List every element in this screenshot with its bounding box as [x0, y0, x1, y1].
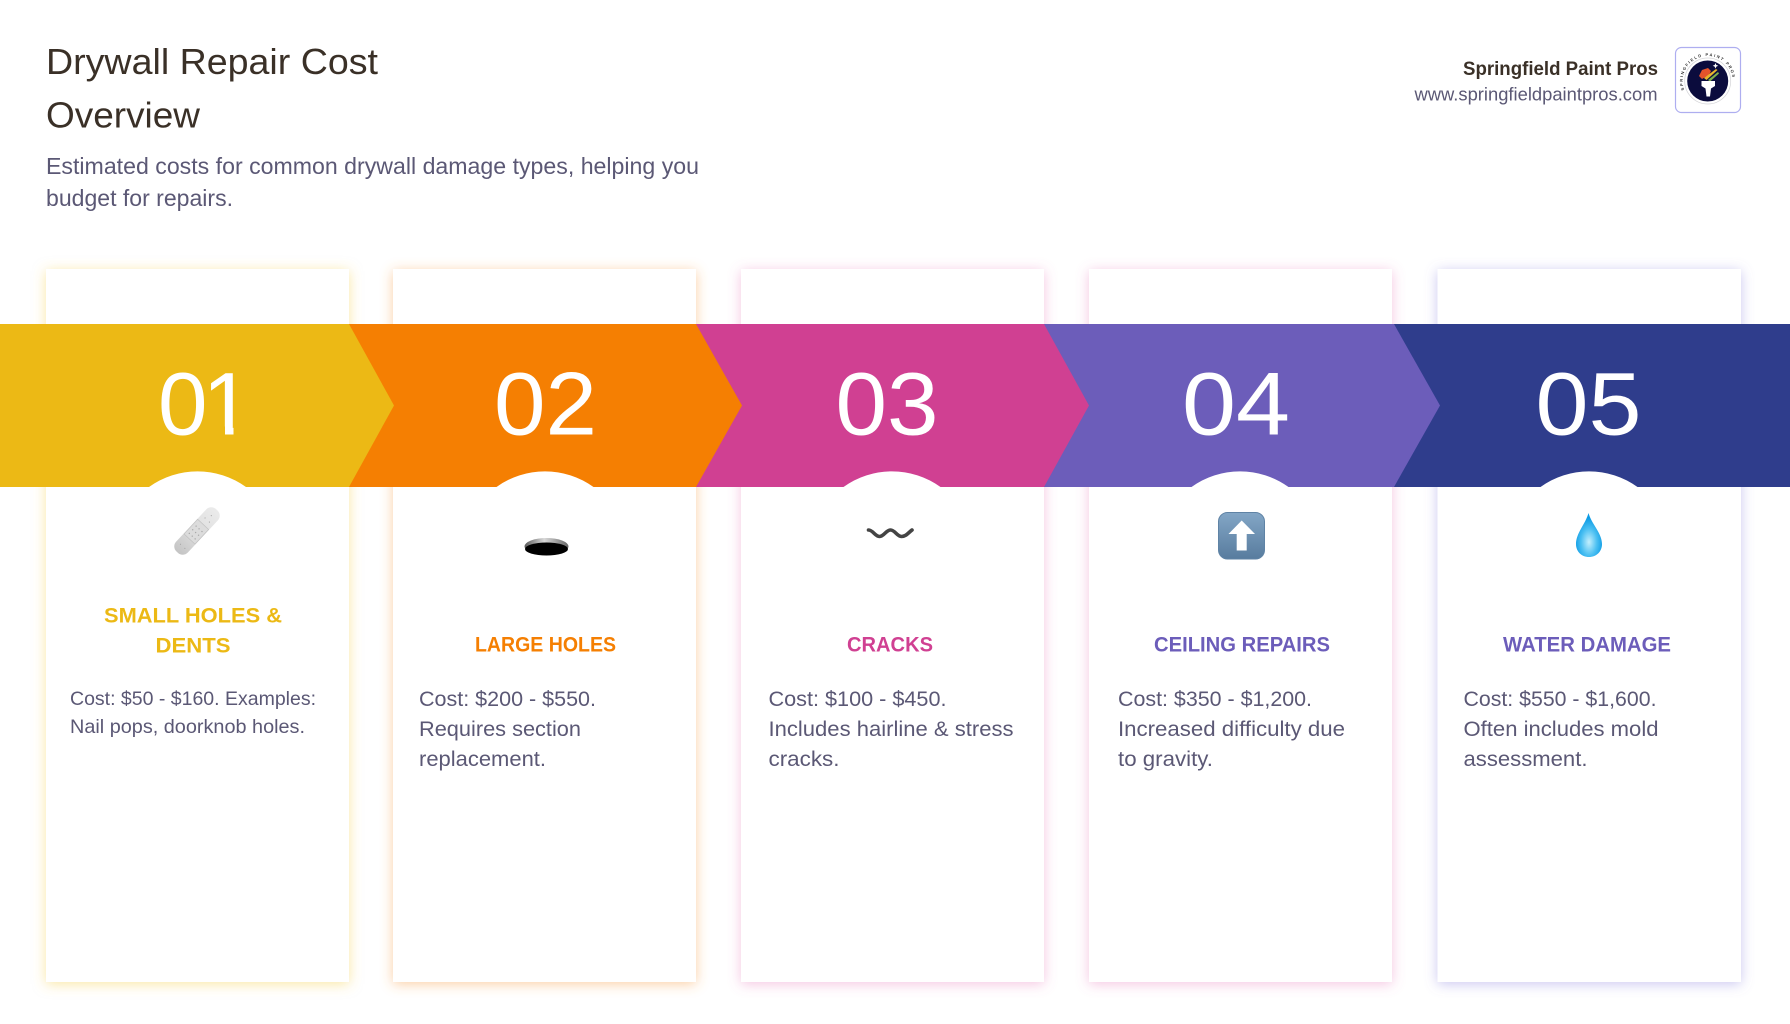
text: cracks cost: Cost: $100 - $450. [768, 688, 946, 711]
text: small holes cost: Nail pops, doorknob holes. [70, 716, 305, 738]
subtitle: Estimated costs for common drywall damage types, helping you [46, 153, 699, 179]
text: ceiling cost: to gravity. [1118, 748, 1213, 771]
panel: large holes [393, 269, 696, 982]
text: water damage cost [1464, 688, 1658, 771]
heading: ceiling repairs: CEILING REPAIRS [1154, 634, 1330, 656]
white circle caps [149, 471, 1638, 487]
icon: up arrow [1218, 512, 1264, 559]
company name and website: www.springfieldpaintpros.com [1414, 84, 1658, 104]
number 01: 0 [158, 354, 208, 454]
number 01 [161, 372, 234, 436]
subtitle [46, 153, 699, 211]
text: water damage cost: Often includes mold [1464, 718, 1658, 741]
text: ceiling cost: Increased difficulty due [1118, 718, 1345, 741]
number 04: 04 [1182, 354, 1290, 454]
chevron band [0, 324, 1790, 487]
title: Drywall Repair Cost [46, 41, 378, 82]
text: small holes cost: Cost: $50 - $160. Examples: [70, 688, 316, 710]
number 03: 03 [836, 354, 938, 454]
heading: large holes: LARGE HOLES [475, 634, 616, 656]
icon: crack wave [868, 530, 912, 536]
panel: small holes and dents [46, 269, 349, 982]
number 05: 05 [1536, 354, 1642, 454]
text: large holes cost [419, 688, 596, 771]
text: cracks cost: cracks. [768, 748, 840, 771]
panel: ceiling repairs [1089, 269, 1392, 982]
panel: water damage [1438, 269, 1741, 982]
text: large holes cost: Cost: $200 - $550. [419, 688, 596, 711]
text: water damage cost: assessment. [1464, 748, 1588, 771]
text: large holes cost: replacement. [419, 748, 546, 771]
company name and website [1414, 59, 1658, 104]
title [46, 41, 378, 136]
logo badge: SPRINGFIELD PAINT PROS [1680, 53, 1735, 90]
panel: cracks [741, 269, 1044, 982]
subtitle: budget for repairs. [46, 185, 233, 211]
text: cracks cost [768, 688, 1014, 771]
text: small holes cost [70, 688, 316, 738]
text: ceiling cost [1118, 688, 1345, 771]
heading: small holes and dents [104, 604, 282, 658]
text: water damage cost: Cost: $550 - $1,600. [1464, 688, 1656, 711]
company name and website: Springfield Paint Pros [1463, 59, 1658, 80]
heading: cracks: CRACKS [847, 634, 933, 656]
icon: water drop [1576, 513, 1602, 557]
icon: bandage [171, 504, 223, 558]
text: ceiling cost: Cost: $350 - $1,200. [1118, 688, 1312, 711]
text: cracks cost: Includes hairline & stress [768, 718, 1014, 741]
heading: small holes and dents: SMALL HOLES & [104, 604, 282, 628]
title: Overview [46, 94, 201, 136]
logo badge [1674, 46, 1742, 114]
heading: small holes and dents: DENTS [156, 634, 230, 658]
heading: water damage: WATER DAMAGE [1503, 634, 1671, 656]
icon: hole [524, 538, 568, 556]
number 02: 02 [494, 354, 597, 454]
text: large holes cost: Requires section [419, 718, 581, 741]
number 01: 1 [202, 354, 252, 454]
